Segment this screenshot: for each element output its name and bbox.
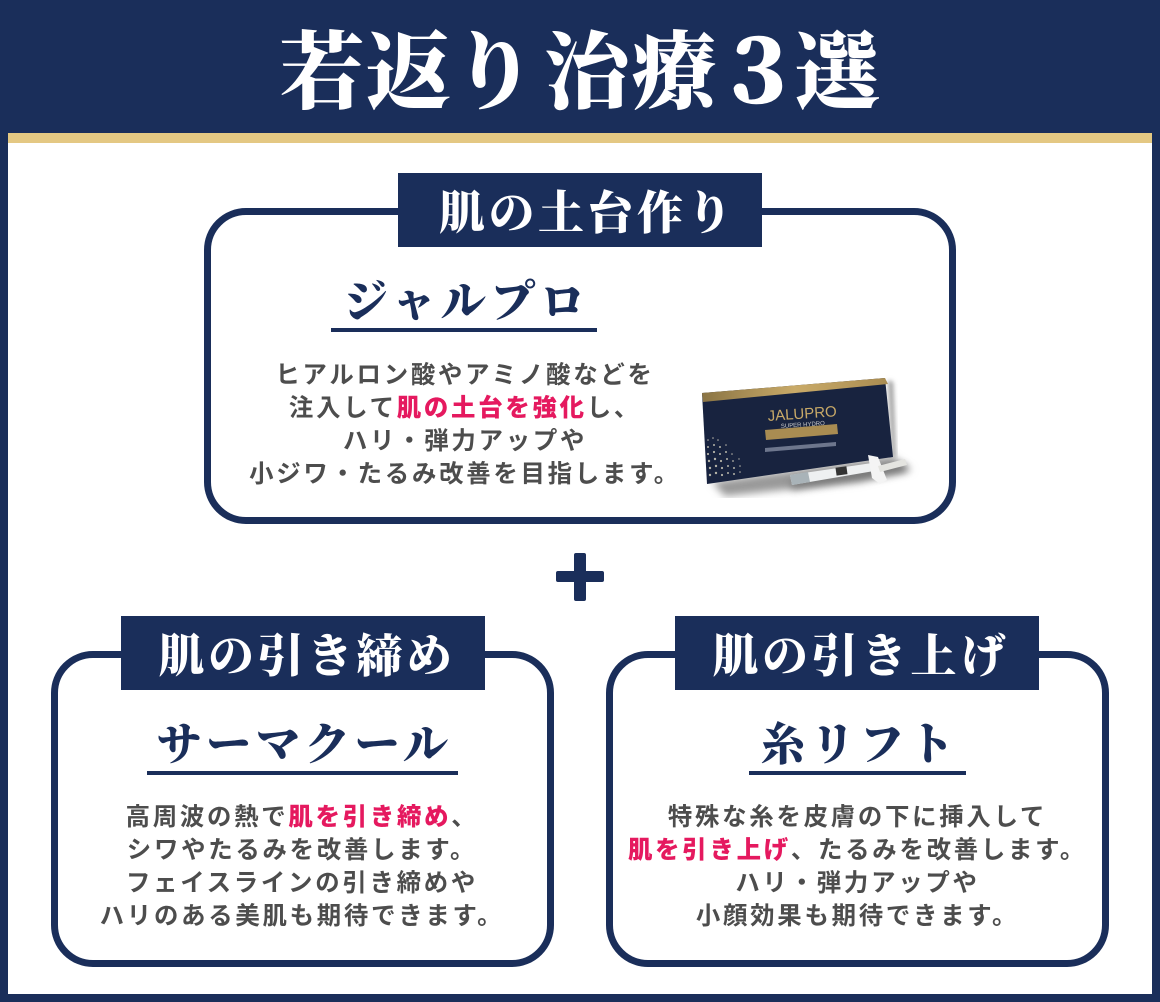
icon: jalupro product box and syringe: SUPER HYDRO bbox=[781, 421, 825, 430]
icon: jalupro product box and syringe: JALUPRO bbox=[767, 403, 837, 425]
text: thread lift description: 肌を引き上げ、たるみを改善します。 bbox=[628, 837, 1087, 864]
text: thread lift description: 特殊な糸を皮膚の下に挿入して bbox=[668, 804, 1047, 831]
text: thermacool description: 高周波の熱で肌を引き締め、 bbox=[126, 804, 478, 831]
title: 若返り治療３選 bbox=[279, 27, 881, 121]
heading: skin lifting bbox=[675, 616, 1039, 690]
text: jalupro description: 小ジワ・たるみ改善を目指します。 bbox=[249, 461, 681, 488]
treatment name: jalupro: ジャルプロ bbox=[343, 277, 589, 327]
text: jalupro description: ヒアルロン酸やアミノ酸などを bbox=[275, 362, 655, 389]
treatment name: thermacool: サーマクール bbox=[156, 720, 453, 770]
heading: skin tightening bbox=[121, 616, 485, 690]
heading: skin foundation bbox=[398, 173, 762, 247]
heading: skin lifting: 肌の引き上げ bbox=[712, 631, 1010, 682]
panel: thermacool bbox=[51, 651, 554, 967]
panel: thread lift bbox=[606, 651, 1109, 967]
underline: thermacool bbox=[147, 771, 458, 775]
text: thermacool description: フェイスラインの引き締めや bbox=[126, 870, 478, 897]
text: jalupro description bbox=[249, 362, 681, 488]
text: thermacool description: ハリのある美肌も期待できます。 bbox=[100, 903, 504, 930]
text: thread lift description bbox=[628, 804, 1087, 930]
text: thermacool description bbox=[100, 804, 504, 930]
icon: plus bbox=[556, 553, 604, 601]
text: thermacool description: シワやたるみを改善します。 bbox=[127, 837, 477, 864]
icon: jalupro product box and syringe bbox=[702, 378, 914, 498]
text: thread lift description: 小顔効果も期待できます。 bbox=[696, 903, 1019, 930]
heading: skin tightening: 肌の引き締め bbox=[158, 631, 456, 682]
underline: thread lift bbox=[749, 771, 966, 775]
underline: jalupro bbox=[331, 328, 597, 332]
treatment name: thread lift: 糸リフト bbox=[760, 720, 958, 770]
header band bbox=[0, 0, 1160, 133]
panel: jalupro bbox=[204, 208, 956, 524]
heading: skin foundation: 肌の土台作り bbox=[439, 188, 736, 239]
gold rule bbox=[8, 133, 1152, 143]
text: jalupro description: 注入して肌の土台を強化し、 bbox=[289, 395, 641, 422]
text: jalupro description: ハリ・弾力アップや bbox=[343, 428, 587, 455]
text: thread lift description: ハリ・弾力アップや bbox=[735, 870, 980, 897]
